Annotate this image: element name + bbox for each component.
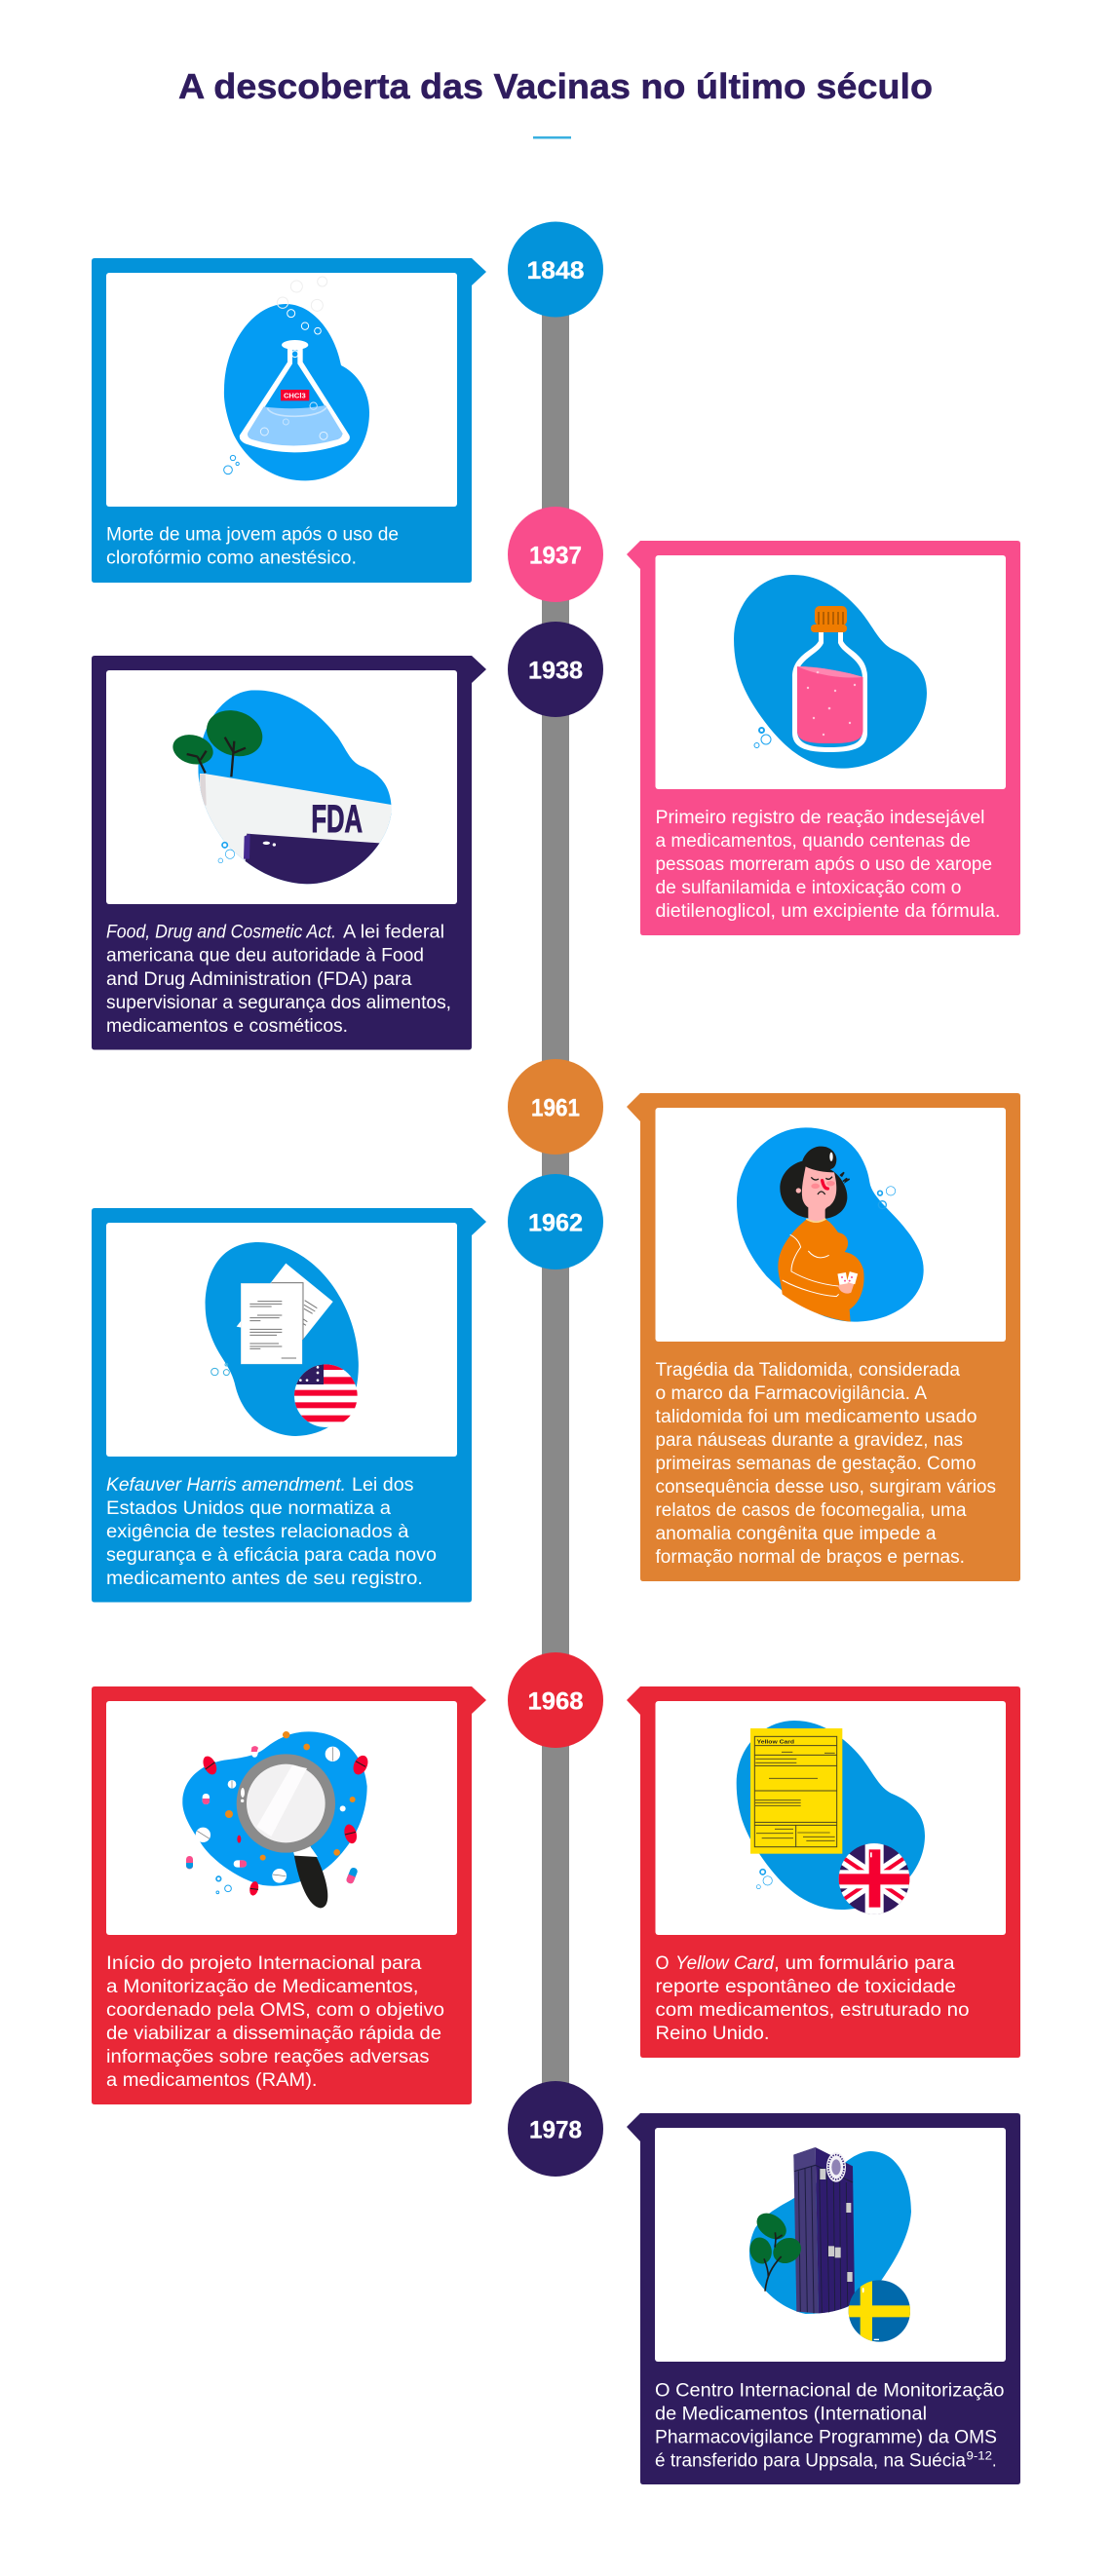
- year marker 1962: [508, 1174, 603, 1269]
- text: 1848: clorofórmio como anestésico.: [106, 548, 357, 569]
- text: 1938: americana que deu autoridade à Food: [106, 945, 424, 966]
- text: 1968 left: [106, 1953, 444, 2091]
- year marker 1961: 1961: [531, 1095, 580, 1122]
- panel: 1968 WHO monitoring: [92, 1686, 486, 2104]
- text: 1968 right: Yellow Card: [675, 1953, 775, 1974]
- text: 1961: formação normal de braços e pernas.: [655, 1547, 965, 1568]
- text: 1968 right: com medicamentos, estruturado no: [655, 2000, 969, 2021]
- text: 1962: Kefauver Harris amendment.: [106, 1475, 346, 1496]
- text: 1968 left: coordenado pela OMS, com o objetivo: [106, 2000, 444, 2021]
- text: 1962: Estados Unidos que normatiza a: [106, 1498, 391, 1519]
- panel: 1961 thalidomide: [627, 1093, 1020, 1581]
- text: 1937: de sulfanilamida e intoxicação com o: [655, 878, 961, 898]
- title: A descoberta das Vacinas no último século: [178, 66, 933, 106]
- text: 1962: Lei dos: [352, 1475, 413, 1496]
- text: 1848: Morte de uma jovem após o uso de: [106, 524, 399, 546]
- text: 1978: [655, 2381, 1004, 2471]
- text: 1938: and Drug Administration (FDA) para: [106, 969, 412, 990]
- text: 1978: 9-12: [967, 2449, 992, 2463]
- icon: WHO tower and Swedish flag: [747, 2147, 911, 2343]
- panel: 1848 chloroform: [92, 258, 486, 583]
- text: 1937: pessoas morreram após o uso de xarope: [655, 854, 992, 875]
- panel: 1938 FDA act: [92, 656, 486, 1050]
- icon: documents and US flag: [206, 1242, 361, 1436]
- text: 1978: de Medicamentos (International: [655, 2405, 927, 2424]
- year marker 1961: [508, 1059, 603, 1155]
- text: 1938: Food, Drug and Cosmetic Act.: [106, 922, 336, 943]
- text: 1938: supervisionar a segurança dos alimentos,: [106, 993, 451, 1013]
- timeline bar: [542, 269, 569, 2120]
- text: 1962: [106, 1475, 437, 1589]
- text: 1978: Pharmacovigilance Programme) da OMS: [655, 2428, 997, 2447]
- year marker 1968: [508, 1652, 603, 1748]
- text: 1961: anomalia congênita que impede a: [655, 1524, 937, 1544]
- text: 1961: o marco da Farmacovigilância. A: [655, 1383, 927, 1404]
- year marker 1848: [508, 222, 603, 318]
- icon: syrup bottle: [734, 575, 927, 769]
- text: 1968 left: Início do projeto Internacional para: [106, 1953, 422, 1974]
- year marker 1938: [508, 622, 603, 717]
- year marker 1978: 1978: [529, 2116, 582, 2143]
- panel: 1968 Yellow Card: [627, 1686, 1020, 2058]
- text: 1978: é transferido para Uppsala, na Suécia: [655, 2451, 966, 2471]
- panel: 1978 Uppsala: [627, 2113, 1020, 2484]
- text: 1961: relatos de casos de focomegalia, uma: [655, 1500, 967, 1521]
- year marker 1978: [508, 2081, 603, 2177]
- text: 1978: O Centro Internacional de Monitorização: [655, 2381, 1004, 2401]
- icon: pregnant woman: [737, 1127, 924, 1322]
- text: 1968 right: , um formulário para: [774, 1953, 955, 1974]
- icon: flask: [224, 277, 369, 480]
- year marker 1937: 1937: [529, 542, 582, 569]
- year marker 1848: 1848: [526, 257, 585, 284]
- icon: magnifier and pills: [182, 1731, 370, 1908]
- text: 1961: para náuseas durante a gravidez, nas: [655, 1430, 963, 1451]
- icon: FDA building: [170, 687, 397, 890]
- text: 1962: medicamento antes de seu registro.: [106, 1569, 423, 1589]
- year marker 1937: [508, 507, 603, 602]
- text: 1937: Primeiro registro de reação indesejável: [655, 808, 984, 828]
- title underline: [533, 136, 571, 138]
- text: 1937: a medicamentos, quando centenas de: [655, 831, 971, 852]
- text: 1938: [106, 922, 451, 1037]
- text: 1978: .: [992, 2451, 996, 2471]
- text: 1968 left: a medicamentos (RAM).: [106, 2070, 318, 2091]
- text: 1961: primeiras semanas de gestação. Como: [655, 1454, 977, 1474]
- text: 1962: segurança e à eficácia para cada novo: [106, 1545, 437, 1566]
- icon: FDA building: FDA: [311, 798, 363, 841]
- panel: 1962 Kefauver Harris: [92, 1208, 486, 1602]
- text: 1961: Tragédia da Talidomida, considerada: [655, 1360, 960, 1381]
- text: 1937: [655, 808, 1000, 922]
- text: 1937: dietilenoglicol, um excipiente da fórmula.: [655, 901, 1000, 922]
- text: 1968 left: a Monitorização de Medicamentos,: [106, 1977, 419, 1997]
- text: 1961: talidomida foi um medicamento usado: [655, 1407, 977, 1427]
- year marker 1938: 1938: [528, 657, 583, 684]
- text: 1961: consequência desse uso, surgiram vários: [655, 1477, 996, 1497]
- icon: yellow card form and UK flag: [737, 1721, 925, 1916]
- year marker 1968: 1968: [528, 1687, 584, 1715]
- icon: yellow card form and UK flag: Yellow Card: [757, 1739, 795, 1745]
- panel: 1937 sulfanilamide syrup: [627, 541, 1020, 935]
- text: 1961: [655, 1360, 996, 1568]
- text: 1968 left: de viabilizar a disseminação rápida de: [106, 2024, 441, 2044]
- text: 1962: exigência de testes relacionados à: [106, 1522, 409, 1542]
- text: 1968 right: O: [655, 1953, 669, 1974]
- text: 1938: A lei federal: [343, 922, 444, 943]
- icon: flask: CHCl3: [284, 391, 306, 399]
- year marker 1962: 1962: [528, 1210, 583, 1237]
- text: 1968 right: reporte espontâneo de toxicidade: [655, 1977, 956, 1997]
- text: 1938: medicamentos e cosméticos.: [106, 1016, 348, 1037]
- text: 1848: [106, 524, 399, 569]
- text: 1968 left: informações sobre reações adversas: [106, 2047, 429, 2067]
- text: 1968 right: Reino Unido.: [655, 2024, 770, 2044]
- text: 1968 right: [655, 1953, 969, 2044]
